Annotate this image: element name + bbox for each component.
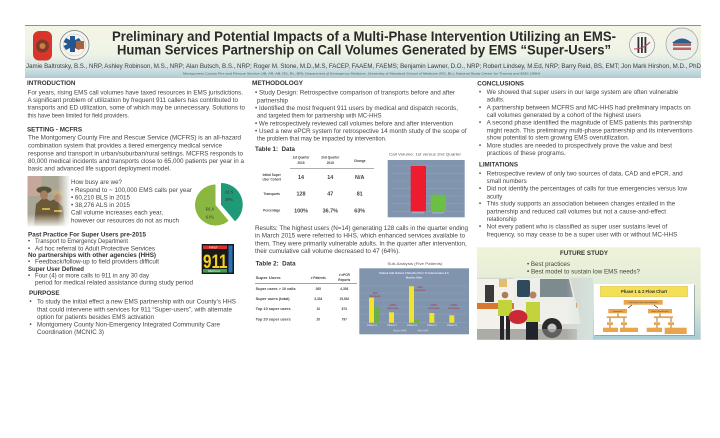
text: conclusions bullets: practices of these programs. bbox=[487, 151, 566, 157]
text: conclusions bullets: A partnership between MCFRS and MC-HHS had preliminary impacts on bbox=[487, 105, 691, 111]
chart: call volume 1st versus 2nd quarter bbox=[388, 152, 465, 217]
chart: sub-analysis five patients: Months After bbox=[406, 276, 422, 280]
diagram: phase 1 and 2 flow chart: Initial Super User Cohort Identified bbox=[629, 301, 658, 304]
header banner bbox=[25, 25, 702, 78]
text: purpose bullets bbox=[30, 300, 236, 336]
chart: sub-analysis five patients: 90% bbox=[417, 285, 423, 289]
text: how busy are we: How busy are we? bbox=[71, 180, 123, 186]
text: introduction body: A significant problem of utilization by frequent 911 callers has contributed to bbox=[28, 98, 239, 104]
chart: BLS ALS pie bbox=[195, 183, 243, 226]
diagram: phase 1 and 2 flow chart: Intervention bbox=[613, 310, 623, 313]
text: limitations bullets: • bbox=[479, 171, 481, 177]
chart: sub-analysis five patients: 100% bbox=[451, 303, 458, 307]
table 2: 3,334 bbox=[314, 297, 323, 301]
text: how busy are we: • 38,276 ALS in 2015 bbox=[71, 203, 131, 209]
heading: introduction: INTRODUCTION bbox=[27, 81, 76, 87]
table 1: Change bbox=[354, 159, 366, 163]
text: purpose bullets: Coordination (MCNIC 3) bbox=[37, 330, 104, 336]
heading: setting: SETTING - MCFRS bbox=[27, 128, 82, 134]
text: limitations bullets: frequency, so may cease to be a super user with or without MC-HHS bbox=[487, 232, 677, 238]
text: past practice: Ad hoc referral to Adult Protective Services bbox=[35, 246, 155, 252]
text: conclusions bullets: We showed that super users in our large system are often vulnerable bbox=[487, 90, 679, 96]
chart: sub-analysis five patients: Decrease bbox=[428, 306, 440, 310]
table 2 bbox=[255, 273, 357, 321]
text: methodology bullets: partnership bbox=[257, 98, 289, 104]
authors: Jamie Baltrotsky, B.S., NRP, Ashley Robinson, M.S., NRP; Alan Butsch, B.S., NRP; Roger M. Stone, M.D.,M.S, FACEP, FAAEM, FAEMS; Benjamin Lawner, D.O., NRP; Robert Lindsey, M.Ed, NRP; Barry Reid, BS, EMT; Jon Mark Hirshon, M.D., PhD bbox=[26, 63, 702, 70]
panel: middle column bbox=[252, 81, 469, 334]
text: past practice: • bbox=[28, 239, 30, 245]
table 1: 2015 bbox=[327, 161, 334, 165]
text: limitations bullets: acuity bbox=[487, 194, 502, 200]
icon: 911 badge bbox=[202, 244, 234, 274]
table 2: Top 10 super users bbox=[256, 307, 291, 311]
text: conclusions bullets: A second phase identified the magnitude of EMS patients this partnership bbox=[487, 121, 692, 127]
text: how busy are we bbox=[71, 180, 192, 224]
chart: sub-analysis five patients: Patient 2 bbox=[387, 324, 397, 327]
text: past practice: Transport to Emergency Department bbox=[35, 239, 128, 245]
chart: BLS ALS pie: 61% bbox=[206, 214, 214, 219]
heading: future study: FUTURE STUDY bbox=[560, 250, 609, 257]
table 1: 100% bbox=[294, 208, 308, 214]
table 2: 15,932 bbox=[339, 297, 349, 301]
table 1: 14 bbox=[298, 175, 304, 181]
text: past practice: Super User Defined bbox=[28, 267, 84, 273]
title: Human Services Partnership on Call Volumes Generated by EMS “Super-Users” bbox=[117, 42, 611, 58]
text: past practice bbox=[28, 232, 193, 286]
text: setting body bbox=[28, 136, 245, 173]
text: future study bullets: • Best model to sustain low EMS needs? bbox=[527, 268, 640, 275]
table 1: Initial Super bbox=[263, 173, 282, 177]
text: past practice: period for medical related assistance during study period bbox=[35, 280, 193, 286]
text: purpose bullets: Montgomery County Non-Emergency Integrated Community Care bbox=[37, 322, 221, 328]
panel: future study bbox=[477, 247, 701, 340]
text: limitations bullets: • bbox=[479, 187, 481, 193]
heading: methodology: METHODOLOGY bbox=[252, 81, 303, 87]
table 2: Top 20 super users bbox=[256, 317, 291, 321]
text: how busy are we: • 60,210 BLS in 2015 bbox=[71, 195, 131, 201]
table 2: Super users > 10 calls bbox=[256, 287, 296, 291]
logo: fire and rescue shield bbox=[33, 31, 52, 60]
chart: sub-analysis five patients: 100% bbox=[390, 303, 397, 307]
text: setting body: 80,000 medical incidents and transports close to 65,000 patients per year in a bbox=[28, 159, 245, 165]
table 1: User Cohort bbox=[262, 177, 282, 181]
table 1: 36.7% bbox=[323, 208, 338, 214]
table 1: 2nd Quarter bbox=[321, 155, 340, 159]
text: setting body: response and transport in urban/suburban/rural settings. MCFRS responds to bbox=[28, 151, 244, 157]
table 2: 20 bbox=[317, 317, 320, 321]
text: past practice: No partnerships with other agencies (HHS) bbox=[28, 253, 156, 259]
table 1: 128 bbox=[296, 192, 306, 198]
title bbox=[112, 29, 616, 58]
text: limitations bullets: Not every patient who is classified as super user sustains level of bbox=[487, 225, 668, 231]
text: conclusions bullets bbox=[479, 90, 693, 157]
text: limitations bullets: Did not identify the percentages of calls for true emergencies versus low bbox=[487, 187, 688, 193]
diagram: phase 1 and 2 flow chart: Phase 1 & 2 Flow Chart bbox=[621, 289, 668, 294]
panel: left column bbox=[27, 81, 246, 336]
table 1: N/A bbox=[355, 175, 364, 181]
table 1: 47 bbox=[327, 192, 333, 198]
text: purpose bullets: • bbox=[30, 300, 32, 306]
text: conclusions bullets: More studies are needed to prospectively prove the value and best bbox=[487, 143, 672, 149]
text: past practice: • bbox=[28, 273, 30, 279]
table 2: Super Users bbox=[256, 276, 281, 280]
text: introduction body: For years, rising EMS call volumes have taxed resources in EMS jurisdictions. bbox=[28, 90, 243, 96]
photo: ambulance and paramedics bbox=[477, 278, 593, 340]
table 1: 1st Quarter bbox=[292, 155, 310, 159]
text: purpose bullets: To study the initial effect a new EMS partnership with our County’s HHS bbox=[37, 300, 236, 306]
heading: table 2: Table 2: Data bbox=[256, 260, 296, 267]
text: methodology bullets: and targeted them for partnership with MC-HHS bbox=[257, 114, 382, 120]
table 2: Reports bbox=[338, 278, 351, 282]
text: future study bullets bbox=[527, 261, 640, 275]
table 1: Percentage bbox=[263, 208, 281, 212]
text: past practice: • bbox=[28, 260, 30, 266]
table 2: 674 bbox=[342, 307, 347, 311]
diagram: phase 1 and 2 flow chart: Super User Analysis bbox=[651, 310, 669, 313]
chart: sub-analysis five patients: Patient 1 bbox=[367, 324, 377, 327]
chart: sub-analysis five patients: Patient 3 bbox=[407, 324, 417, 327]
chart: sub-analysis five patients: Patient 4 bbox=[427, 324, 437, 327]
text: methodology bullets: • Used a new ePCR system for retrospective 14 month study of the scope of bbox=[255, 129, 467, 135]
text: conclusions bullets: • bbox=[479, 121, 481, 127]
text: methodology bullets bbox=[255, 91, 467, 143]
icon: 911 badge: MEDICAL bbox=[208, 269, 221, 273]
chart: sub-analysis five patients: Decrease bbox=[448, 306, 460, 310]
text: past practice: • bbox=[28, 246, 30, 252]
logo: national study center seal bbox=[666, 28, 698, 60]
photo: firefighters bbox=[28, 176, 70, 226]
chart: sub-analysis five patients: Decrease bbox=[369, 294, 381, 298]
text: introduction body bbox=[28, 90, 246, 119]
text: setting body: combination system that provides a tiered emergency medical service bbox=[28, 144, 223, 150]
text: conclusions bullets: show potential to stem growing EMS overutilization. bbox=[487, 136, 630, 142]
chart: sub-analysis five patients: Patient 5 bbox=[447, 324, 457, 327]
icon: 911 badge: 911 bbox=[203, 252, 228, 273]
chart: sub-analysis five patients: Sub-Analysis (Five Patients) bbox=[388, 262, 442, 266]
heading: table 1: Table 1: Data bbox=[255, 146, 295, 153]
text: results: them. They were primarily vulnerable adults. In the quarter after intervention, bbox=[255, 241, 467, 247]
logo: EMS star of life seal bbox=[60, 30, 89, 60]
text: limitations bullets: • bbox=[479, 225, 481, 231]
table 1: 2015 bbox=[297, 161, 305, 165]
chart: sub-analysis five patients bbox=[359, 262, 469, 334]
text: conclusions bullets: • bbox=[479, 105, 481, 111]
table 2: 4,393 bbox=[340, 287, 349, 291]
diagram: phase 1 and 2 flow chart bbox=[594, 284, 695, 336]
chart: BLS ALS pie: BLS bbox=[206, 207, 215, 212]
text: results: in March 2015 were referred to HHS, which enhanced services available to bbox=[255, 234, 466, 240]
chart: sub-analysis five patients: After HHS bbox=[418, 330, 429, 332]
text: introduction body: transports and ED utilization, some of which may be unnecessary. Solutions to bbox=[28, 106, 246, 112]
text: how busy are we: Call volume increases each year, bbox=[71, 211, 163, 217]
text: setting body: The Montgomery County Fire and Rescue Service (MCFRS) is an all-hazard bbox=[28, 136, 241, 142]
text: conclusions bullets: • bbox=[479, 90, 481, 96]
text: limitations bullets: small numbers bbox=[487, 179, 527, 185]
text: past practice: Four (4) or more calls to 911 in any 30 day bbox=[35, 273, 149, 279]
heading: conclusions: CONCLUSIONS bbox=[477, 81, 524, 87]
text: results bbox=[255, 226, 468, 255]
table 2: 265 bbox=[316, 287, 321, 291]
table 1: Transports bbox=[263, 192, 280, 196]
chart: call volume 1st versus 2nd quarter: Call Volume: 1st versus 2nd Quarter bbox=[389, 152, 462, 156]
text: methodology bullets: • We retrospectively reviewed call volumes before and after intervention bbox=[255, 121, 453, 127]
chart: sub-analysis five patients: 100% bbox=[431, 303, 438, 307]
text: introduction body: this have been limited for field providers. bbox=[28, 113, 129, 119]
table 1: 14 bbox=[327, 175, 333, 181]
text: limitations bullets bbox=[479, 171, 688, 238]
text: purpose bullets: that could intervene with services for 911 “Super-users”, with alternate bbox=[37, 307, 233, 313]
panel: right column bbox=[477, 81, 701, 340]
table 1: 81 bbox=[357, 192, 363, 198]
chart: sub-analysis five patients: 40% bbox=[372, 291, 378, 295]
text: methodology bullets: • Study Design: Retrospective comparison of transports before and after bbox=[255, 91, 455, 97]
title: Preliminary and Potential Impacts of a Multi-Phase Intervention Utilizing an EMS- bbox=[112, 29, 616, 44]
table 2: 10 bbox=[317, 307, 320, 311]
text: past practice: Feedback/follow-up to field providers difficult bbox=[35, 260, 159, 266]
chart: BLS ALS pie: 39% bbox=[225, 197, 233, 202]
text: setting body: basic and advanced life support deployment model. bbox=[28, 167, 171, 173]
table 1 bbox=[262, 155, 374, 214]
table 2: # ePCR bbox=[339, 273, 351, 277]
chart: sub-analysis five patients: Patient Call Volume 6 Months Prior To Intervention & 6 bbox=[379, 271, 449, 275]
affiliations: Montgomery County Fire and Rescue Service (JB, AR, AB, RS, RL, BR); Department of Emergency Medicine, University of Maryland School of Medicine (RS, BL); National Study Center for Trauma and EMS (JMH) bbox=[183, 71, 540, 75]
text: conclusions bullets: call volumes generated by a cohort of the highest users bbox=[487, 113, 641, 119]
logo: university column seal bbox=[630, 32, 654, 58]
chart: BLS ALS pie: ALS bbox=[225, 189, 234, 194]
text: purpose bullets: • bbox=[30, 322, 32, 328]
text: how busy are we: • Respond to ~ 100,000 EMS calls per year bbox=[71, 188, 192, 194]
text: conclusions bullets: • bbox=[479, 143, 481, 149]
heading: purpose: PURPOSE bbox=[29, 291, 60, 297]
text: limitations bullets: Retrospective review of only two sources of data, CAD and ePCR, and bbox=[487, 171, 683, 177]
table 1: 63% bbox=[354, 208, 365, 214]
table 2: 797 bbox=[342, 317, 347, 321]
text: limitations bullets: • bbox=[479, 202, 481, 208]
chart: sub-analysis five patients: Decrease bbox=[414, 288, 426, 292]
text: results: Results: The highest users (N=14) generating 128 calls in the quarter ending bbox=[255, 226, 468, 232]
text: methodology bullets: • Identified the most frequent 911 users by medical and dispatch records, bbox=[255, 106, 458, 112]
text: past practice: Past Practice For Super Users pre-2015 bbox=[28, 232, 147, 238]
text: limitations bullets: partnership and reduced call volumes but not a cause-and-effect bbox=[487, 209, 666, 215]
text: results: their cumulative call volume decreased to 47 (64%). bbox=[255, 249, 400, 255]
text: how busy are we: however our resources do not as much bbox=[71, 218, 179, 224]
text: methodology bullets: the problem that may be impacted by intervention. bbox=[257, 137, 387, 143]
table 2: Super users (total) bbox=[256, 297, 290, 301]
heading: limitations: LIMITATIONS bbox=[479, 162, 518, 168]
text: purpose bullets: option for patients besides EMS activation bbox=[37, 315, 154, 321]
icon: 911 badge: FIRST bbox=[209, 245, 218, 249]
text: future study bullets: • Best practices bbox=[527, 261, 570, 268]
text: conclusions bullets: adults. bbox=[487, 98, 505, 104]
text: limitations bullets: relationship bbox=[487, 217, 517, 223]
chart: sub-analysis five patients: Before HHS bbox=[394, 330, 407, 332]
text: limitations bullets: This study supports an association between changes entailed in the bbox=[487, 202, 676, 208]
table 2: # Patients bbox=[311, 276, 326, 280]
text: conclusions bullets: might reach. This preliminary multi-phase partnership and its interventions bbox=[487, 128, 693, 134]
chart: sub-analysis five patients: Decrease bbox=[387, 306, 399, 310]
